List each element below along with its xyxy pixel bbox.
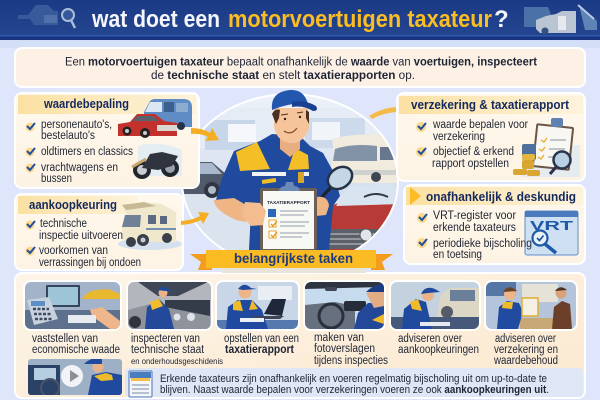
arrow: to appraiser from waardebepaling [191,128,219,141]
banner: belangrijkste taken [190,250,393,273]
icon: VRT register: VRT [530,219,574,233]
panel: onafhankelijk & deskundig [404,185,585,264]
bullet list: objectief & erkend [433,146,514,158]
clipboard [260,182,317,250]
neck [280,135,300,157]
heading: aankoopkeuring [29,197,117,212]
bullet list: rapport opstellen [432,158,509,170]
arrow: from right panel [369,107,397,119]
icon: camper and vans silhouette [524,5,597,34]
intro text panel: Een motorvoertuigen taxateur bepaalt onafhankelijk de waarde van voertuigen, inspecteert [65,56,537,68]
task: technische inspectie [126,280,213,331]
captions: economische waade [32,344,120,356]
bullet list: verzekering [433,131,485,143]
task: taxatierapport [215,280,300,331]
heading: waardebepaling [43,96,129,111]
icon: report, coins and magnifier [513,118,580,177]
bullet list: bestelauto's [41,130,95,142]
header band: motorvoertuigen taxateur [228,6,492,33]
captions: waardebehoud [493,355,558,367]
video thumbnail [28,358,122,397]
bullet list: bussen [41,173,72,185]
bullet list [26,218,141,269]
arrow: pointer [410,187,421,205]
captions: adviseren over [495,333,556,345]
bullet list: oldtimers en classics [41,146,133,158]
icon: blue van [144,99,192,130]
intro text panel: de technische staat en stelt taxatierapporten op. [151,70,415,82]
bullet list: erkende taxateurs [433,222,516,234]
footer text: Erkende taxateurs zijn onafhankelijk en voeren regelmatig bijscholing uit om up-to-date te [160,373,547,385]
heading: verzekering & taxatierapport [411,97,570,112]
bullet list: vrachtwagens en [41,162,118,174]
captions: inspecteren van [131,333,200,345]
cap [272,90,308,110]
captions: vaststellen van [32,333,98,345]
captions: aankoopkeuringen [398,344,479,356]
face [274,108,309,143]
arrow: to appraiser from aankoopkeuring [181,212,209,225]
appraiser figure [214,90,356,250]
task: economische waarde [23,280,122,331]
captions: opstellen van een [224,333,299,345]
bullet list: waarde bepalen voor [432,119,528,131]
bullet list: technische [40,218,87,230]
banner: belangrijkste taken: belangrijkste taken [234,250,353,266]
icon: document [129,371,152,397]
captions: fotoverslagen [314,343,375,355]
icon: red car [118,114,177,138]
panel: aankoopkeuring [15,194,183,270]
captions: maken van [314,332,364,344]
icon: motorbike [132,144,182,179]
bullet list [417,210,532,261]
captions [32,332,558,367]
panel: verzekering & taxatierapport [397,93,585,181]
footer text [160,373,549,396]
heading: onafhankelijk & deskundig [426,189,576,204]
bullet list: en toetsing [433,249,482,261]
task: aankoopkeuringen [389,280,481,331]
header band [0,0,600,40]
footer band [125,368,583,397]
bullet list [26,119,133,185]
panel: bottom tasks [15,273,585,398]
title: wat doet een [91,6,220,33]
clipboard: TAXATIERAPPORT [267,200,310,205]
left hand [242,202,266,226]
captions: en onderhoudsgeschidenis [131,356,223,366]
forearm [214,198,248,222]
red car [329,198,395,250]
bullet list: inspectie uitvoeren [39,230,123,242]
bullet list: personenauto's, [41,119,112,131]
footer text: blijven. Naast waarde bepalen voor verzekeringen voeren ze ook aankoopkeuringen uit. [160,384,549,396]
icon: camper [118,202,182,250]
captions: tijdens inspecties [314,355,388,367]
building [190,108,390,148]
task: verzekering advies [484,280,578,331]
task: fotoverslagen [303,280,386,331]
dark car [184,162,224,194]
icon: car and magnifier silhouette [18,5,75,28]
bullet list: verrassingen bij ondoen [39,257,141,269]
shirt [216,134,340,250]
captions: adviseren over [398,333,462,345]
captions: taxatierapport [225,344,294,356]
bullet list: VRT-register voor [433,210,516,222]
panel: waardebepaling [15,93,199,188]
bullet list [416,119,528,170]
icon: VRT register [525,211,578,255]
magnifier [321,185,333,198]
intro text panel [15,48,585,87]
captions: technische staat [131,344,205,356]
bullet list: voorkomen van [39,245,108,257]
captions: verzekering en [494,344,558,356]
bullet list: periodieke bijscholing [433,238,532,250]
right hand [316,197,329,216]
camper [330,134,400,183]
panel: central scene with appraiser [182,90,399,250]
header band: ? [494,6,509,33]
